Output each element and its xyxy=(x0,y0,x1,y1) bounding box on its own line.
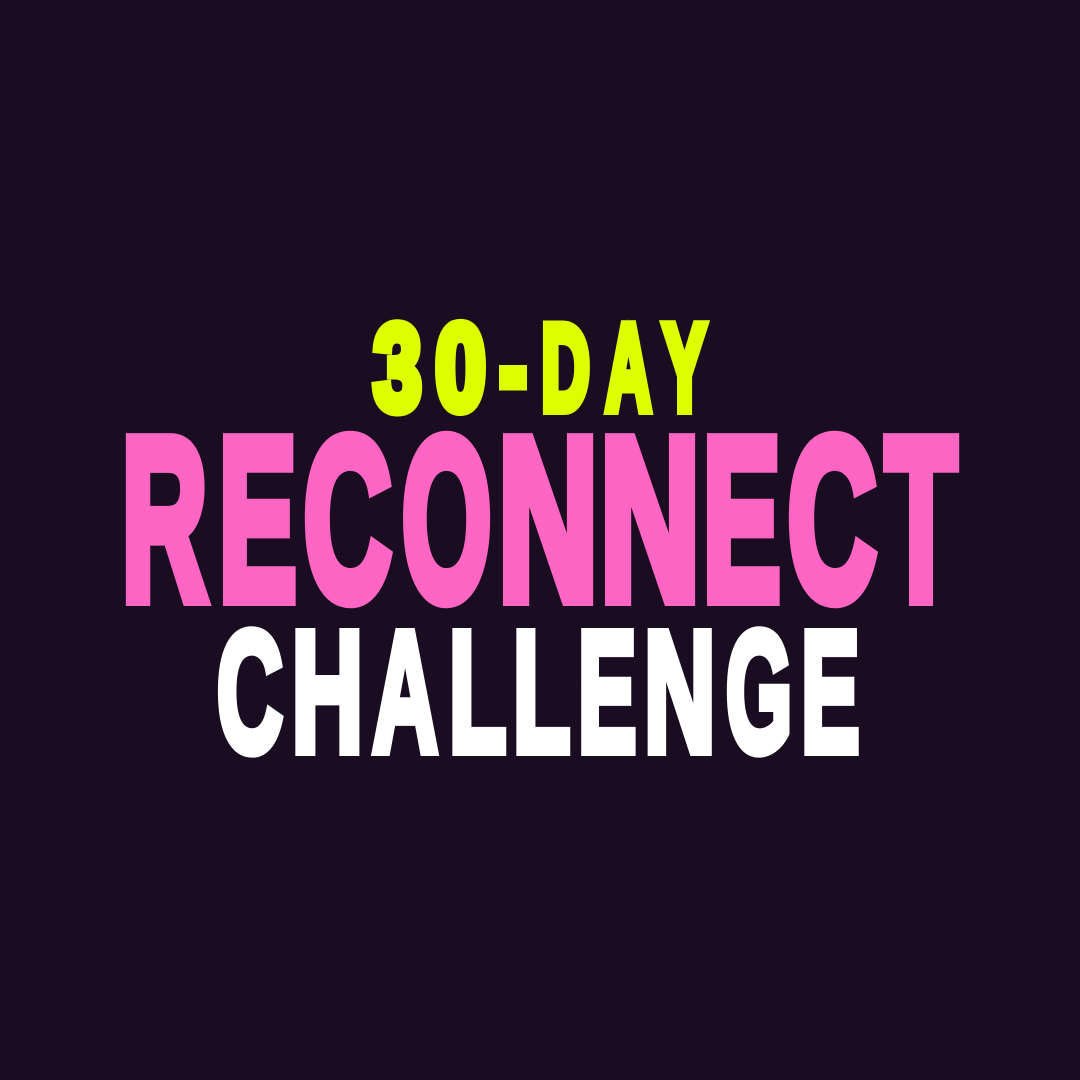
title line: RECONNECT: C xyxy=(788,390,876,648)
title line: CHALLENGE: G xyxy=(726,597,792,788)
title line: RECONNECT: C xyxy=(304,390,392,648)
title line: RECONNECT: R xyxy=(122,390,208,648)
title line: RECONNECT: N xyxy=(600,390,700,648)
title line: RECONNECT: E xyxy=(703,390,781,648)
title line: RECONNECT: O xyxy=(402,390,492,648)
title line: RECONNECT: E xyxy=(219,390,297,648)
title line: 30-DAY: 0 xyxy=(436,300,486,436)
title line: CHALLENGE: L xyxy=(449,597,506,788)
title line: 30-DAY: 3 xyxy=(374,300,421,436)
title line: RECONNECT: T xyxy=(885,390,957,648)
title xyxy=(122,300,957,788)
title line: 30-DAY: Y xyxy=(663,300,706,436)
title line: CHALLENGE: L xyxy=(513,597,570,788)
title line: CHALLENGE: E xyxy=(578,597,636,788)
title line: CHALLENGE: C xyxy=(217,597,283,788)
title line: 30-DAY: D xyxy=(542,300,590,436)
title line: 30-DAY: A xyxy=(606,300,651,436)
title line: CHALLENGE: A xyxy=(372,597,438,788)
title line: 30-DAY: - xyxy=(500,300,527,436)
title line: RECONNECT: N xyxy=(498,390,598,648)
title line: CHALLENGE: H xyxy=(292,597,363,788)
title line: CHALLENGE: E xyxy=(801,597,860,788)
title line: CHALLENGE: N xyxy=(644,597,716,788)
